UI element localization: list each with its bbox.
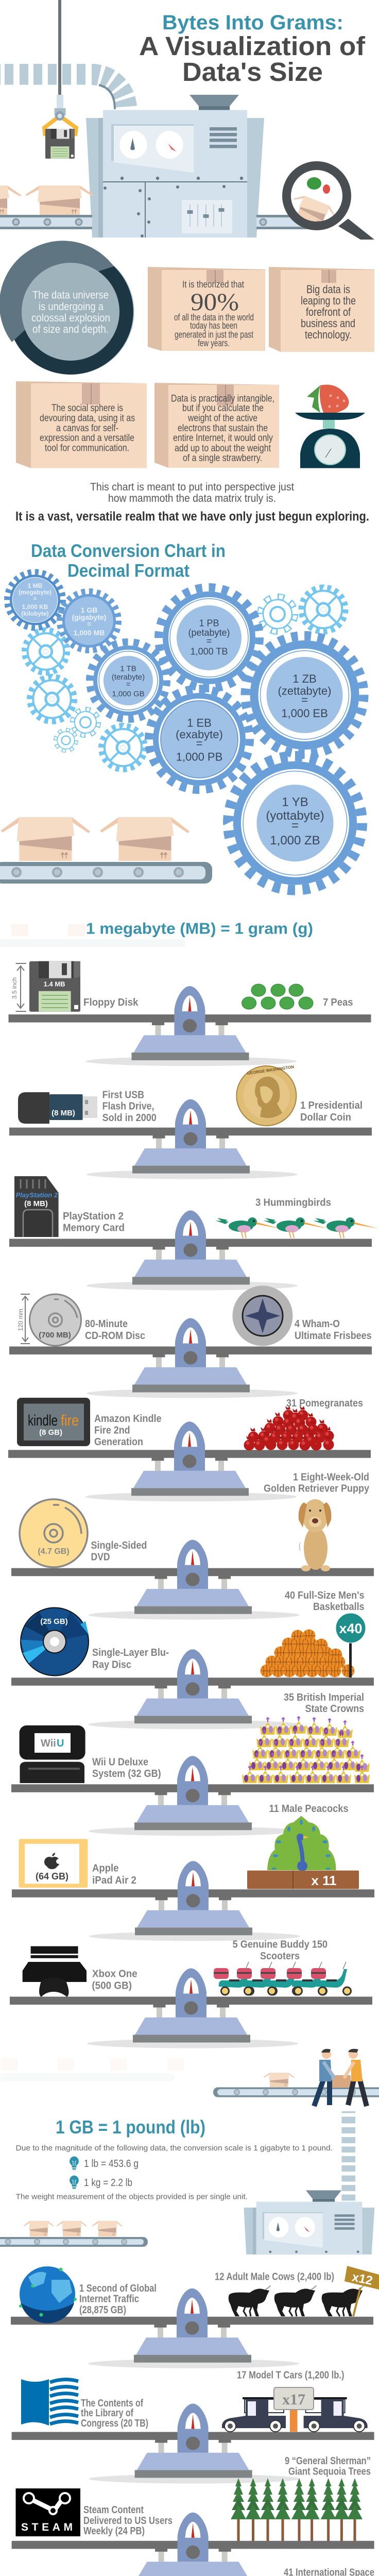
label: 12 Adult Male Cows (2,400 lb): [215, 2272, 334, 2283]
label: [233, 1939, 328, 1962]
label: Flash Drive,: [102, 1100, 154, 1112]
gear: cog: [56, 730, 76, 751]
scale row: DVD vs puppy: [11, 1471, 374, 1620]
icon: Library of Congress: [21, 2379, 78, 2426]
label: [85, 1318, 145, 1342]
label: Delivered to US Users: [83, 2515, 173, 2527]
icon: bulb: [70, 2175, 79, 2189]
hopper: [190, 95, 239, 110]
scale: [9, 1099, 372, 1179]
label: Ray Disc: [92, 1659, 131, 1670]
panel: intangible data box: electrons that sustain the: [178, 423, 268, 434]
label: 7 Peas: [323, 997, 353, 1008]
duct: [0, 64, 127, 109]
icon: sequoia trees: [231, 2478, 363, 2541]
gear: 1 TB: (terabyte): [112, 673, 145, 682]
panel: 90% box: today has been: [190, 320, 237, 331]
icon: floppy disk: 1.4 MB: [44, 980, 65, 988]
label: Wii U Deluxe: [92, 1757, 148, 1768]
gear: 1 TB: [90, 642, 167, 719]
label: Steam Content: [83, 2504, 144, 2516]
label: Single-Layer Blu-: [92, 1647, 169, 1658]
label: State Crowns: [305, 1703, 364, 1715]
label: 5 Genuine Buddy 150: [233, 1939, 328, 1950]
label: [63, 1211, 125, 1233]
icon: Model T cars: x17: [282, 2391, 305, 2408]
label: Fire 2nd: [94, 1425, 130, 1436]
gear: 1 YB: 1 YB: [282, 795, 308, 809]
panel: big data box: Big data is: [306, 283, 350, 296]
scale row: Wii U vs crowns: [11, 1692, 374, 1836]
panel: social sphere box: devouring data, using it as: [40, 413, 135, 423]
gear: 1 EB: [149, 689, 250, 790]
scale: [11, 1649, 374, 1729]
label: Single-Sided: [91, 1540, 147, 1551]
gear: 1 MB: 1 MB: [28, 582, 43, 589]
scale row: Xbox One vs scooters: [10, 1939, 372, 2048]
intro text: This chart is meant to put into perspective just: [90, 481, 294, 493]
icon: puppy: [299, 1499, 331, 1571]
gear: wheel: [25, 630, 67, 673]
conveyor: chart section: [0, 817, 212, 884]
label: Golden Retriever Puppy: [264, 1483, 370, 1494]
gear: 1 ZB: 1,000 EB: [281, 707, 328, 720]
gear: 1 EB: (exabyte): [176, 728, 223, 741]
icon: Kindle Fire: (8 GB): [39, 1428, 62, 1437]
intro text: how mammoth the data matrix truly is.: [108, 493, 276, 504]
gear: 1 EB: 1 EB: [187, 717, 212, 730]
gear: 1 ZB: [245, 636, 364, 754]
sign: x40: [336, 1613, 366, 1677]
panel: intangible data box: Data is practically intangible,: [171, 394, 274, 404]
scale: [8, 1421, 371, 1501]
gear: cog: [72, 709, 99, 736]
gear: 1 PB: 1,000 TB: [191, 647, 228, 657]
icon: floppy disk: 3.5 inch: [11, 977, 18, 999]
icon: peacock on sign: x 11: [311, 1873, 337, 1888]
icon: pomegranates: [244, 1406, 334, 1451]
scale row: floppy disk vs 7 peas: [8, 961, 371, 1066]
label: [83, 2504, 173, 2537]
panel: 90% box: of all the data in the world: [174, 312, 254, 323]
panel: social sphere box: a canvas for self-: [56, 423, 118, 434]
label: Congress (20 TB): [81, 2418, 148, 2429]
label: Sold in 2000: [102, 1112, 157, 1124]
icon: kitchen scale with strawberry: [295, 385, 365, 468]
icon: presidential dollar coin: GEORGE WASHINGTON: [247, 1064, 295, 1076]
label: 1 Eight-Week-Old: [293, 1471, 369, 1483]
label: Weekly (24 PB): [83, 2526, 145, 2537]
label: First USB: [102, 1089, 144, 1100]
icon: Model T cars: [222, 2387, 368, 2432]
panel: intangible data box: add up to about the weight: [175, 443, 271, 454]
icon: CD-ROM: (700 MB): [39, 1331, 71, 1340]
heading: conversion chart: Decimal Format: [67, 561, 190, 581]
panel: big data box: [269, 267, 374, 352]
scale: [11, 1756, 374, 1836]
icon: memory card: PlayStation 2: [16, 1191, 58, 1199]
icon: Blu-ray disc: [21, 1607, 89, 1675]
label: [264, 1471, 370, 1494]
claw with floppy: [44, 0, 76, 159]
gear: 1 TB: 1 TB: [120, 664, 136, 673]
label: Floppy Disk: [83, 997, 139, 1008]
icon: globe: [19, 2266, 77, 2323]
label: [284, 1692, 364, 1715]
gear: 1 PB: (petabyte): [188, 628, 230, 638]
text: conversion notes: Due to the magnitude of the following data, the conversion scale is 1 gigabyte to 1 pound.: [15, 2144, 333, 2153]
label: Dollar Coin: [300, 1112, 351, 1123]
panel: social sphere box: tool for communication.: [45, 443, 129, 453]
label: [92, 1757, 161, 1780]
label: [102, 1089, 157, 1124]
label: [79, 2283, 157, 2316]
scale row: Library of Congress vs Model T cars: [12, 2370, 374, 2483]
label: 40 Full-Size Men's: [285, 1590, 365, 1601]
icon: crowns: [242, 1716, 370, 1784]
label: the Library of: [81, 2408, 133, 2419]
icon: Blu-ray disc: (25 GB): [40, 1617, 68, 1626]
scale: [11, 2289, 373, 2368]
icon: Xbox One: [23, 1946, 87, 1997]
scale row: CD-ROM vs frisbees: [9, 1286, 372, 1398]
title: Bytes Into Grams:: [162, 11, 343, 34]
label: 1 Second of Global: [79, 2283, 157, 2294]
gear: wheel: [30, 677, 74, 721]
icon: Wii U: [20, 1725, 85, 1783]
panel: intangible data box: weight of the active: [187, 413, 257, 423]
gear: 1 PB: =: [206, 636, 212, 646]
icon: CD-ROM: [17, 1294, 81, 1346]
icon: USB flash drive: (8 MB): [51, 1109, 75, 1117]
icon: hummingbirds: [215, 1217, 378, 1238]
label: 31 Pomegranates: [286, 1398, 363, 1409]
label: 80-Minute: [85, 1318, 128, 1330]
panel: 90% box: generated in just the past: [175, 330, 253, 340]
label: [285, 1590, 365, 1613]
icon: peacock on sign: [247, 1816, 359, 1889]
scale: [9, 1318, 372, 1398]
panel: big data box: forefront of: [306, 306, 351, 318]
panel: data universe disc: is undergoing a: [39, 301, 104, 313]
label: Basketballs: [313, 1601, 365, 1613]
label: 35 British Imperial: [284, 1692, 364, 1703]
gear: 1 YB: [228, 756, 362, 890]
label: [300, 1100, 363, 1123]
icon: USB flash drive: [18, 1092, 97, 1124]
label: Internet Traffic: [79, 2294, 139, 2305]
gear: 1 YB: (yottabyte): [266, 809, 324, 823]
gear: 1 MB: (kilobyte): [21, 610, 49, 617]
panel: data universe disc: colossal explosion: [31, 312, 110, 324]
sign: x12: x12: [351, 2270, 374, 2288]
label: (500 GB): [92, 1980, 132, 1991]
scale: [12, 1861, 374, 1941]
icon: frisbee: [233, 1286, 292, 1346]
conveyor: left: [0, 185, 94, 229]
panel: 90% box: It is theorized that: [182, 279, 244, 290]
label: [94, 1413, 162, 1448]
text: conversion notes: [15, 2144, 333, 2201]
gear: cog: [260, 597, 295, 632]
gear: 1 TB: =: [126, 680, 131, 689]
label: Memory Card: [63, 1222, 125, 1233]
label: 4 Wham-O: [295, 1318, 340, 1330]
title: Data's Size: [182, 57, 323, 87]
label: [92, 1647, 169, 1670]
scale: [12, 2513, 374, 2576]
label: CD-ROM Disc: [85, 1330, 145, 1342]
gear: 1 PB: 1 PB: [199, 618, 219, 629]
text: pound conversion: 1 lb = 453.6 g: [84, 2158, 139, 2170]
panel: social sphere box: [16, 381, 147, 468]
label: 11 Male Peacocks: [269, 1803, 348, 1815]
scale row: USB drive vs dollar coin: [9, 1064, 372, 1179]
sign: x12: [344, 2266, 379, 2316]
title: A Visualization of: [139, 31, 366, 61]
icon: Kindle Fire: [17, 1398, 90, 1446]
scale: [8, 986, 371, 1066]
label: Generation: [94, 1436, 143, 1448]
panel: social sphere box: The social sphere is: [51, 403, 123, 414]
icon: iPad: [19, 1839, 88, 1888]
sign: x40: x40: [339, 1621, 363, 1636]
icon: Kindle Fire: fire: [61, 1412, 79, 1429]
scale row: PlayStation 2 memory card vs hummingbirds: [9, 1176, 378, 1290]
gear: wheel: [302, 588, 345, 631]
icon: Wii U: Wii: [41, 1738, 56, 1749]
panel: intangible data box: but if you calculate the: [182, 403, 264, 414]
gear: 1 GB: (gigabyte): [72, 613, 106, 621]
gear: 1 ZB: 1 ZB: [292, 672, 317, 685]
icon: cows: [229, 2285, 364, 2316]
conveyor: workers section: [0, 2049, 379, 2106]
panel: social sphere box: expression and a versatile: [40, 433, 134, 444]
label: [92, 1863, 136, 1886]
icon: presidential dollar coin: [236, 1064, 296, 1126]
scale: [9, 1211, 372, 1290]
icon: peas: [242, 984, 313, 1009]
gear: 1 PB: [159, 587, 260, 688]
label: 1 Presidential: [300, 1100, 363, 1111]
scale: [11, 1540, 374, 1620]
scale: [12, 2403, 374, 2483]
panel: intangible data box: of a single strawberry.: [183, 453, 262, 464]
icon: Steam logo: [15, 2488, 80, 2536]
icon: scooters: [214, 1962, 352, 1996]
panel: intangible data box: entire Internet, it would only: [173, 433, 273, 444]
panel: data universe disc: The data universe: [32, 290, 109, 301]
label: The Contents of: [81, 2398, 143, 2409]
label: Apple: [92, 1863, 118, 1874]
gear: 1 GB: =: [87, 620, 91, 628]
label: [81, 2398, 148, 2429]
icon: floppy disk: [11, 961, 80, 1012]
panel: 90% box: 90%: [191, 289, 239, 316]
panel: intangible data box: [154, 383, 279, 468]
label: 17 Model T Cars (1,200 lb.): [237, 2370, 344, 2381]
scale row: Steam vs sequoia trees: [12, 2455, 374, 2576]
label: System (32 GB): [92, 1768, 161, 1780]
scale: [10, 1968, 372, 2048]
gear: 1 MB: [7, 572, 63, 628]
label: Scooters: [260, 1951, 300, 1962]
panel: big data box: technology.: [305, 328, 352, 341]
label: [295, 1318, 372, 1342]
label: (28,875 GB): [79, 2304, 126, 2316]
label: [285, 2455, 371, 2478]
icon: DVD: [20, 1499, 88, 1567]
gear: 1 GB: 1,000 MB: [74, 629, 105, 637]
gear: 1 EB: 1,000 PB: [176, 751, 222, 764]
scale row: iPad vs peacocks: [12, 1803, 374, 1941]
icon: bulb: [70, 2157, 79, 2170]
scale row: internet traffic vs cows: [11, 2266, 379, 2368]
scale row: Blu-ray vs basketballs: [11, 1590, 374, 1729]
icon: CD-ROM: 120 mm: [17, 1309, 24, 1331]
chart: gears of data units: [7, 572, 364, 890]
panel: data universe disc: of size and depth.: [32, 324, 109, 335]
panel: big data box: business and: [301, 317, 355, 330]
panel: data universe disc: [0, 241, 134, 375]
gear: 1 GB: [60, 591, 118, 650]
machine illustration: header: [0, 0, 374, 240]
panel: 90% box: few years.: [198, 338, 230, 348]
label: iPad Air 2: [92, 1875, 136, 1886]
machine illustration: mid section: [244, 2111, 374, 2255]
label: DVD: [91, 1552, 110, 1563]
conveyor: right: [256, 215, 318, 229]
icon: basketballs: [261, 1629, 354, 1677]
heading: conversion chart: [31, 541, 226, 581]
icon: workers passing a box: [314, 2049, 367, 2106]
label: Amazon Kindle: [94, 1413, 162, 1425]
gear: 1 MB: 1,000 KB: [22, 603, 48, 611]
gear: wheel: [101, 726, 145, 769]
icon: DVD: (4.7 GB): [38, 1547, 70, 1556]
label: Ultimate Frisbees: [295, 1330, 372, 1342]
text: measurement note: The weight measurement of the objects provided is per single unit.: [15, 2193, 248, 2201]
icon: Wii U: U: [57, 1738, 64, 1749]
label: PlayStation 2: [63, 1211, 124, 1222]
gear: 1 YB: 1,000 ZB: [270, 834, 320, 848]
icon: Kindle Fire: kindle: [28, 1412, 58, 1429]
icon: memory card: (8 MB): [24, 1199, 48, 1208]
icon: iPad: (64 GB): [36, 1871, 68, 1882]
gear: 1 MB: =: [33, 595, 37, 602]
label: 3 Hummingbirds: [255, 1197, 331, 1208]
gear: 1 TB: 1,000 GB: [112, 689, 145, 698]
machine body: [86, 110, 264, 238]
heading: conversion chart: Data Conversion Chart in: [31, 541, 226, 561]
gear: 1 YB: =: [291, 819, 299, 833]
title: [139, 11, 366, 87]
text: kilogram conversion: 1 kg = 2.2 lb: [84, 2177, 132, 2189]
gear: 1 ZB: =: [301, 693, 308, 706]
panel: 90% box: [148, 267, 265, 351]
gear: 1 MB: (megabyte): [19, 588, 51, 596]
heading: 1 GB equals 1 pound: 1 GB = 1 pound (lb): [56, 2116, 205, 2138]
label: [92, 1969, 137, 1991]
icon: memory card: [14, 1176, 59, 1237]
gear: 1 ZB: (zettabyte): [278, 685, 331, 698]
conveyor: left mid section: [0, 2221, 148, 2247]
heading: 1 megabyte equals 1 gram: 1 megabyte (MB) = 1 gram (g): [86, 920, 313, 938]
panel: big data box: leaping to the: [301, 294, 356, 307]
label: Xbox One: [92, 1969, 137, 1980]
gear: 1 EB: =: [196, 737, 202, 750]
magnifier: [286, 166, 374, 240]
gear: 1 GB: 1 GB: [81, 606, 97, 614]
label: [91, 1540, 147, 1563]
intro text: [15, 481, 369, 524]
scale row: Kindle Fire vs pomegranates: [8, 1398, 371, 1501]
heading: 1 megabyte equals 1 gram: [0, 920, 313, 947]
icon: Steam logo: STEAM: [21, 2521, 73, 2533]
